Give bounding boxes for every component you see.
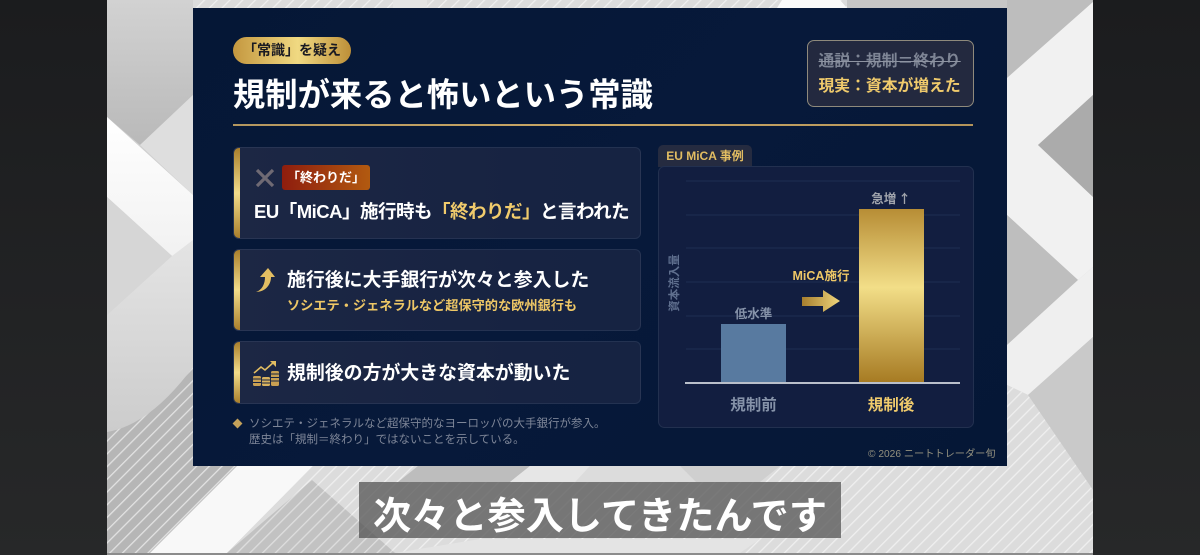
copyright: © 2026 ニートトレーダー旬 (868, 449, 996, 460)
y axis label: 資本流入量 (667, 254, 681, 312)
slide panel (193, 8, 1007, 466)
note line two: 歴史は「規制＝終わり」ではないことを示している。 (249, 434, 525, 446)
subtitle caption: 次々と参入してきたんです (373, 495, 827, 538)
card: banks entered after enforcement (233, 249, 641, 331)
category label: before: 規制前 (730, 395, 777, 414)
tag: common-sense pill (233, 37, 351, 64)
icon: diamond (233, 419, 242, 428)
badge: the end: 「終わりだ」 (287, 170, 365, 185)
card: bigger capital moved after regulation (233, 341, 641, 404)
myth line: 通説：規制＝終わり (818, 53, 961, 70)
badge: the end (282, 165, 370, 190)
card subheading: ソシエテ・ジェネラルなど超保守的な欧州銀行も (287, 298, 577, 313)
category label: after: 規制後 (868, 395, 915, 414)
note with diamond bullet (232, 417, 606, 446)
chart tab: EU MiCA case (658, 145, 752, 167)
icon: cross (256, 169, 274, 187)
card text: EU「MiCA」施行時も「終わりだ」と言われた (254, 201, 629, 222)
bar: before regulation: 低水準 (735, 306, 772, 321)
callout: myth versus reality (807, 40, 974, 107)
icon: rising curved arrow (256, 268, 275, 292)
bar: after regulation (859, 188, 924, 383)
tag: common-sense pill: 「常識」を疑え (243, 42, 341, 58)
bar: after regulation: 急増↑ (871, 188, 911, 207)
icon: coins and rising chart (253, 361, 279, 386)
arrow: MiCA enforcement (793, 268, 849, 312)
chart tab: EU MiCA case: EU MiCA 事例 (666, 149, 744, 163)
arrow: MiCA enforcement: MiCA施行 (793, 268, 849, 283)
gold divider (233, 124, 973, 126)
card: they said it was the end (233, 147, 641, 239)
title: 規制が来ると怖いという常識 (233, 77, 653, 113)
bar: before regulation (721, 306, 786, 383)
card heading: 施行後に大手銀行が次々と参入した (287, 270, 589, 291)
card text: 規制後の方が大きな資本が動いた (287, 363, 570, 384)
note line one: ソシエテ・ジェネラルなど超保守的なヨーロッパの大手銀行が参入。 (249, 418, 606, 430)
reality line: 現実：資本が増えた (818, 78, 961, 95)
bar chart panel (658, 166, 974, 428)
